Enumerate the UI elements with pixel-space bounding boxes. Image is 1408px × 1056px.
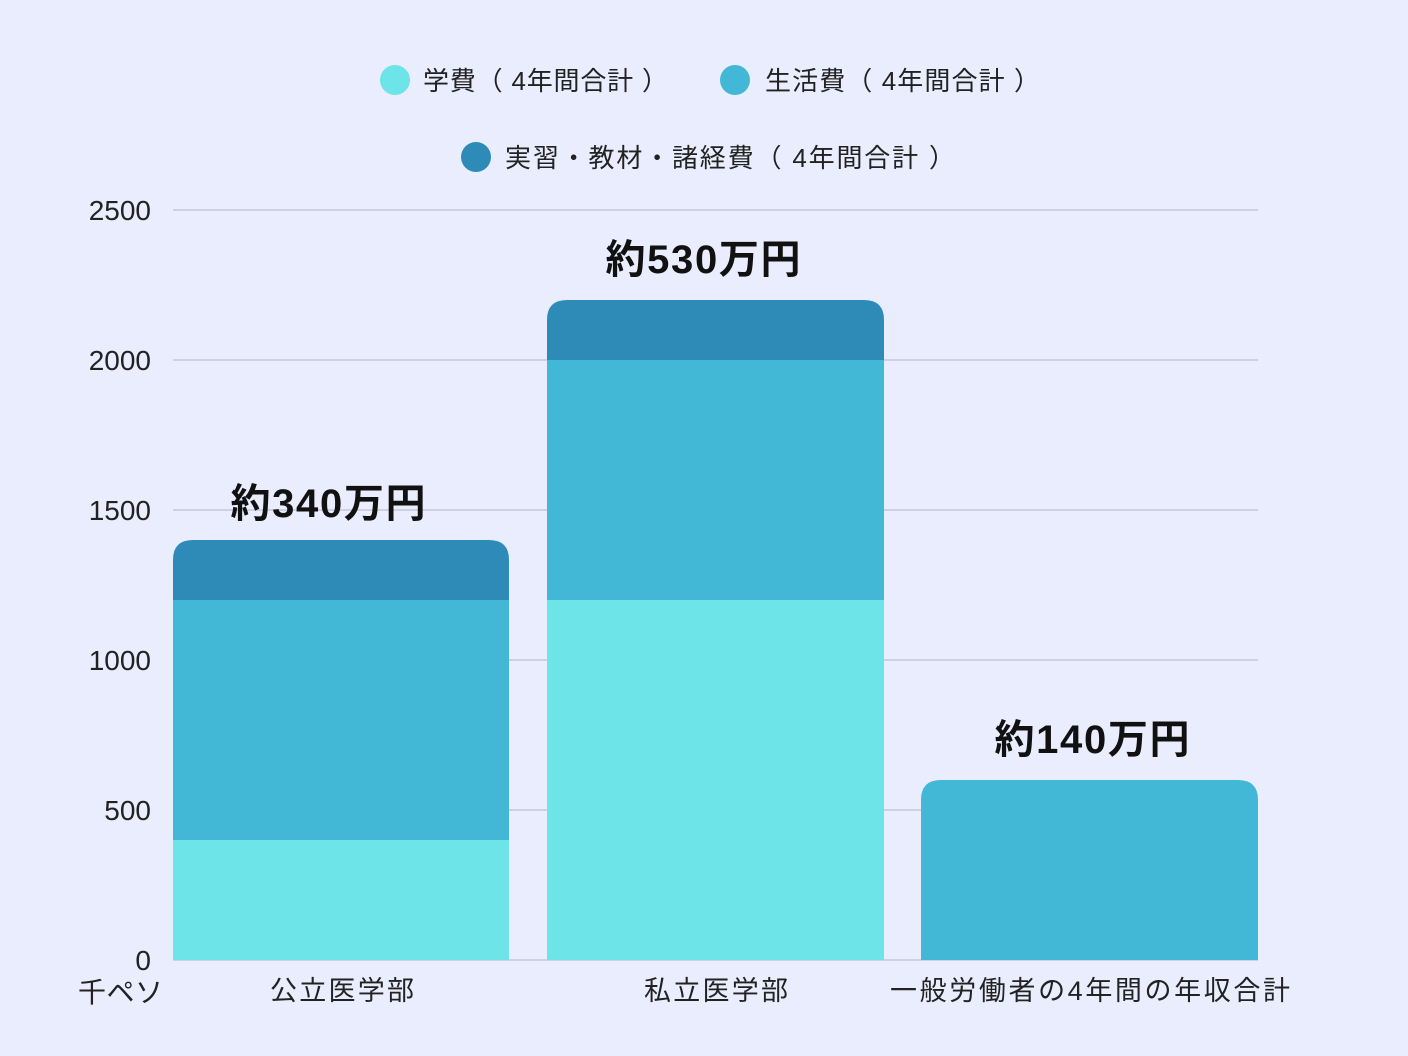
legend item: living: 生活費（ 4年間合計 ） [765, 66, 1040, 96]
x labels: 公立医学部 [270, 976, 414, 1006]
legend item: practice: 実習・教材・諸経費（ 4年間合計 ） [505, 143, 955, 173]
value labels: 約340万円 [230, 482, 426, 526]
y axis labels: 2500 [89, 195, 151, 226]
x labels: 一般労働者の4年間の年収合計 [890, 976, 1290, 1006]
legend item: tuition: 学費（ 4年間合計 ） [423, 66, 668, 96]
bar: private [547, 300, 884, 960]
y axis labels: 1500 [89, 495, 151, 526]
x labels: 私立医学部 [644, 976, 788, 1006]
value labels [230, 238, 1190, 762]
y axis labels: 千ペソ [78, 977, 163, 1008]
value labels: 約140万円 [994, 718, 1190, 762]
x labels [270, 976, 1290, 1006]
y axis labels: 0 [135, 945, 151, 976]
y axis labels: 500 [104, 795, 151, 826]
y axis labels: 2000 [89, 345, 151, 376]
bar: worker [921, 780, 1258, 960]
value labels: 約530万円 [606, 238, 800, 282]
y axis labels: 1000 [89, 645, 151, 676]
legend [380, 65, 1040, 173]
bar: public [173, 540, 509, 960]
y axis labels [78, 195, 163, 1008]
